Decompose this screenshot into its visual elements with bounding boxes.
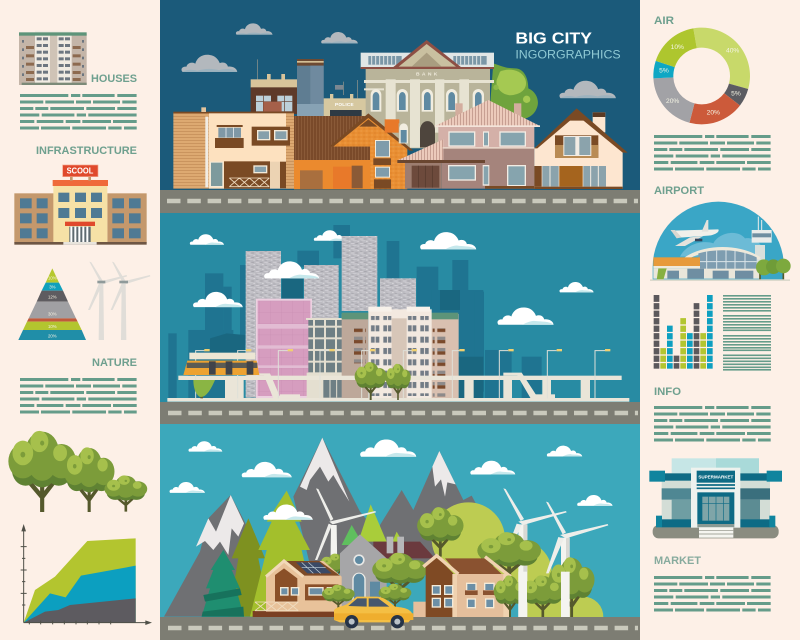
trees background [320,507,595,617]
airplane [671,220,719,246]
heading: info: INFO [654,386,681,398]
title: INGORGRAPHICS [515,48,621,62]
bank building [361,40,521,148]
overpass [167,373,629,402]
chart: donut: 20% [666,98,679,105]
chart: pyramid: 10% [48,275,57,280]
chart: pyramid: 10% [48,324,57,329]
icon: wind turbines [88,262,150,340]
foreground shrubs [322,553,428,609]
street lamps [196,349,610,398]
police building: POLICE [335,102,354,107]
text block: nature [20,378,137,414]
chart: donut: 10% [671,44,684,51]
text block: info [654,406,771,442]
cloud over towers [264,261,319,278]
road 1 [160,190,640,213]
right column [649,15,791,612]
apartment block [342,307,459,398]
scene: big city old town [160,0,640,190]
chart: pyramid: 30% [48,312,57,317]
airport trees [657,259,791,281]
train [183,353,259,375]
text block: houses [20,94,137,130]
glass office block [306,318,357,398]
chart: pyramid: 3% [49,285,56,290]
chart: block bar chart [653,295,713,369]
cream cottage [534,108,628,189]
cloud in front of pine [263,505,313,520]
chart: donut: 40% [726,47,739,54]
heading: market: MARKET [654,555,701,567]
beige house [413,556,511,617]
heading: houses: HOUSES [91,73,137,85]
scene: modern downtown [160,213,640,402]
chart: donut: 5% [731,91,741,98]
glass tower [297,59,324,116]
green hills [432,502,603,617]
scene: green countryside [160,424,640,618]
heading: air: AIR [654,15,674,27]
chart: area chart [21,524,152,625]
turbine towers front [518,572,570,618]
yellow car [334,597,413,628]
heading: airport: AIRPORT [654,185,704,197]
icon: school building: SCOOL [67,167,93,176]
heading: nature: NATURE [92,357,137,369]
left column [8,31,152,625]
clouds [190,230,594,325]
pine trees [202,491,403,617]
chart: pyramid: 12% [48,294,57,299]
road 3 [160,617,640,640]
illustration: airport dome [650,202,791,281]
dark skyline [168,225,542,398]
brick office building [251,59,297,114]
pink glass building [256,299,312,398]
heading: infrastructure: INFRASTRUCTURE [36,145,137,157]
text block: air [654,135,771,170]
title: BIG CITY [515,30,593,47]
grey towers [246,236,416,398]
wooden house with solar panels [253,561,342,618]
title [515,30,621,62]
police building [324,80,366,116]
road 2 [160,402,640,424]
tree behind bank [490,63,538,120]
pink stone house [397,100,540,189]
icon: school building [14,165,147,245]
chart: donut [653,28,750,124]
stone church [340,534,435,617]
icon: apartment building [19,31,87,85]
clouds [181,23,616,98]
orange house [294,113,413,189]
control tower [752,217,772,265]
clouds [170,439,613,506]
chart: pyramid [18,268,86,340]
small text column [723,295,771,371]
street trees [355,362,411,400]
foreground trees [494,575,565,617]
chart: pyramid: 20% [48,333,57,338]
small tree [193,380,215,398]
text block: market [654,576,771,612]
icon: trees [8,431,147,512]
wind turbines [315,488,608,618]
bank building: BANK [416,71,438,77]
chart: donut: 20% [707,110,720,117]
icon: supermarket: SUPERMARKET [698,475,733,481]
terminal [653,247,761,279]
mountains [164,438,477,617]
left townhouse [173,107,294,189]
chart: donut: 5% [659,67,669,74]
icon: supermarket [649,458,782,538]
